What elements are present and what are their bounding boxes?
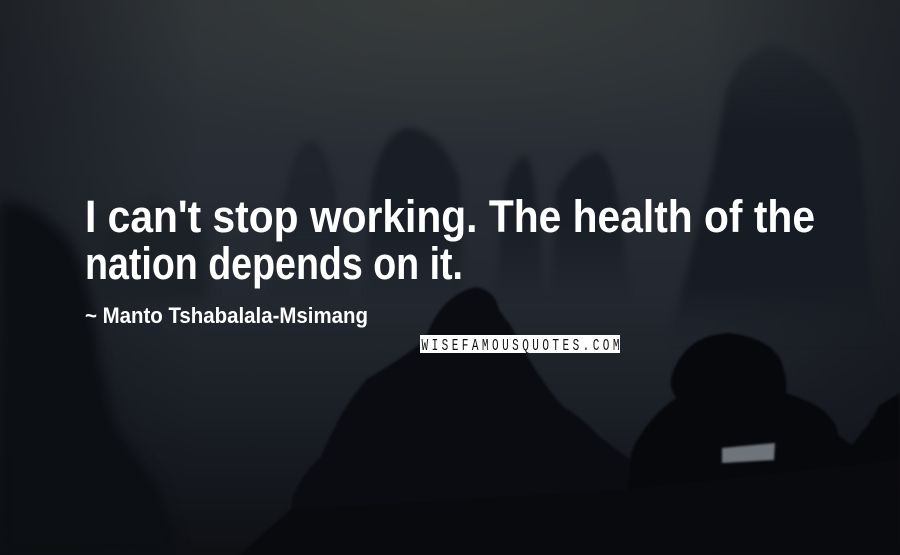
background: faint temple on cliff	[100, 193, 208, 300]
background: foreground rocks	[240, 287, 900, 555]
author attribution: ~ Manto Tshabalala-Msimang	[85, 303, 368, 328]
quote text: I can't stop working. The health of the	[85, 191, 815, 242]
quote text	[85, 191, 815, 289]
watermark badge: WISEFAMOUSQUOTES.COM	[422, 337, 623, 356]
quote text: nation depends on it.	[85, 238, 463, 289]
background: distant misty peaks	[272, 46, 880, 345]
background: small sign on rock	[722, 443, 775, 463]
background: left cliff	[0, 202, 180, 555]
